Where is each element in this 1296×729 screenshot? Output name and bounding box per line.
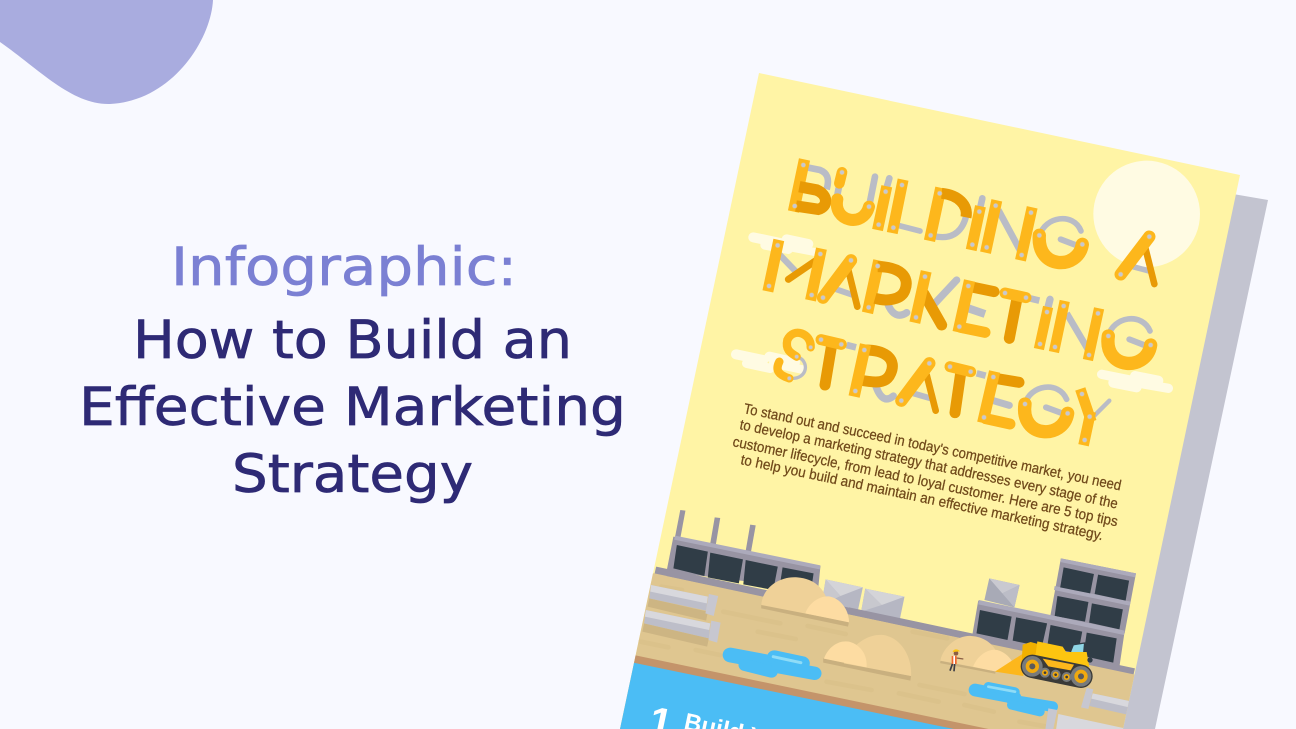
- bulldozer: [1021, 641, 1093, 687]
- construction scene: [620, 510, 1137, 729]
- building left: [666, 510, 820, 590]
- heading block: [79, 237, 626, 505]
- heading: Infographic: Infographic:: [171, 237, 517, 298]
- right buildings: [972, 558, 1136, 667]
- intro paragraph: [731, 401, 1123, 544]
- puddle left: [730, 655, 815, 673]
- book shadow: [1120, 194, 1268, 729]
- section heading: [654, 708, 756, 729]
- puddle right: [975, 687, 1053, 712]
- page background: [620, 73, 1240, 728]
- heading line 1: How to Build an: [133, 310, 572, 371]
- paragraph line 3: customer lifecycle, from lead to loyal customer. Here are 5 top tips: [731, 434, 1119, 530]
- sand mounds: [761, 577, 1013, 681]
- worker: [950, 649, 963, 671]
- heading line 3: Strategy: [232, 444, 473, 505]
- paragraph line 2: to develop a marketing strategy that addresses every stage of the: [738, 417, 1119, 513]
- blade: [995, 653, 1023, 676]
- ground: [620, 567, 1137, 729]
- infographic page preview: [620, 73, 1240, 729]
- heading line 2: Effective Marketing: [79, 377, 626, 438]
- crates left: [821, 579, 905, 620]
- pipes right: [1046, 688, 1129, 729]
- title word: BUILDING A: [792, 163, 1154, 284]
- river strip and blue section: [620, 655, 988, 729]
- title word: STRATEGY: [777, 333, 1109, 442]
- lower right scene: [950, 649, 1143, 729]
- decorative blob: [0, 0, 213, 104]
- paragraph line 1: To stand out and succeed in today's competitive market, you need: [742, 401, 1123, 494]
- left pipes: [642, 585, 721, 647]
- title word: MARKETING: [767, 243, 1153, 363]
- construction title: [767, 163, 1154, 442]
- sun and clouds: [736, 161, 1200, 388]
- paragraph line 4: to help you build and maintain an effective marketing strategy.: [739, 452, 1105, 544]
